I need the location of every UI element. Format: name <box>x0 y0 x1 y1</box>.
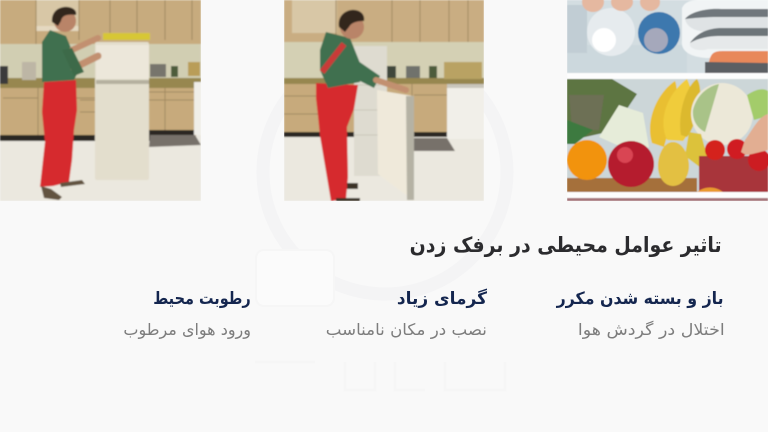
heading: گرمای زیاد <box>397 289 487 309</box>
lower shelf: fruit and vegetables <box>567 79 768 192</box>
description: ورود هوای مرطوب <box>123 320 251 339</box>
heading: رطوبت محیط <box>154 289 251 309</box>
heading: باز و بسته شدن مکرر <box>557 289 724 309</box>
technician <box>40 7 98 200</box>
upper shelf: bottles and fish <box>567 0 768 73</box>
description: اختلال در گردش هوا <box>578 320 725 339</box>
photo: technician opening the freezer door <box>284 0 484 201</box>
icon: refrigerator <box>95 33 150 180</box>
technician <box>316 10 406 201</box>
photo: food stored in the fridge <box>567 0 768 201</box>
description: نصب در مکان نامناسب <box>326 320 487 339</box>
column: repeated opening and closing <box>556 289 725 339</box>
column: high heat <box>326 288 487 339</box>
title: تاثیر عوامل محیطی در برفک زدن <box>410 233 722 257</box>
photo: technician levelling the fridge <box>0 0 201 201</box>
column: ambient humidity <box>123 289 251 339</box>
icon: open refrigerator <box>354 46 414 200</box>
